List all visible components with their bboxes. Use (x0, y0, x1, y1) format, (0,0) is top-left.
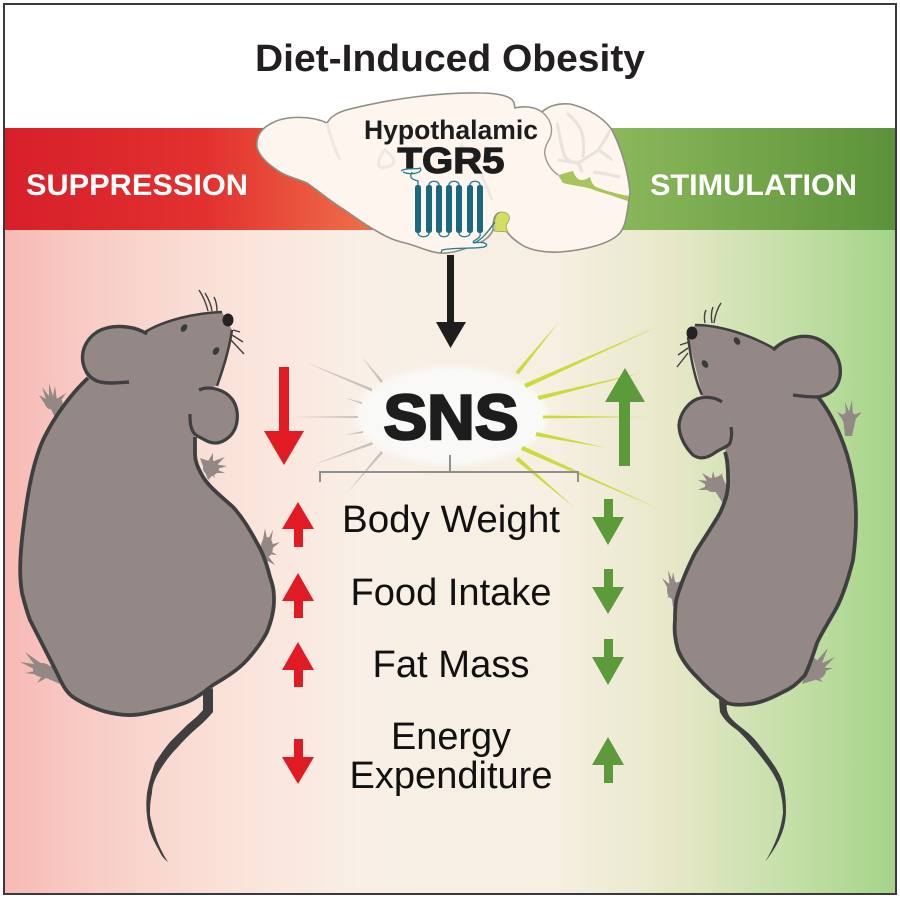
title: Diet-Induced Obesity (255, 38, 645, 80)
outcomes list (342, 499, 560, 797)
obese mouse head (145, 312, 232, 386)
lean mouse (662, 303, 862, 862)
arrow: receptor to SNS (436, 255, 466, 348)
obese mouse nose (222, 314, 234, 326)
energy: Energy (391, 716, 511, 758)
brain midline fold (327, 123, 492, 200)
TGR5 label: TGR5 (398, 140, 504, 181)
SNS label: SNS (384, 383, 518, 453)
fat mass: Fat Mass (372, 644, 530, 686)
obese mouse whiskers (199, 290, 244, 354)
yellow rays: stimulated SNS (516, 323, 657, 508)
yellow pituitary (494, 212, 509, 232)
lean mouse ear (773, 336, 840, 397)
TGR5 receptor (401, 168, 495, 253)
cerebellum outline (542, 112, 558, 175)
SNS glow ellipse (356, 367, 548, 465)
obese mouse body (20, 312, 274, 715)
lean mouse eyes (700, 336, 742, 369)
large red down arrow (264, 367, 304, 465)
cerebellum folds (557, 113, 620, 177)
lean mouse tail (719, 700, 786, 862)
food intake: Food Intake (350, 572, 552, 614)
green arrows column (592, 499, 624, 783)
stimulation label: STIMULATION (650, 169, 857, 202)
bracket (320, 455, 578, 482)
lean mouse body (675, 325, 856, 705)
suppression band (4, 128, 404, 230)
body weight: Body Weight (342, 499, 560, 541)
expenditure: Expenditure (350, 755, 552, 797)
lean mouse outline (675, 397, 856, 705)
transmembrane helices (415, 185, 483, 233)
gray rays: suppressed SNS (293, 357, 383, 493)
green brainstem region (558, 171, 629, 201)
obese mouse tail (146, 688, 213, 862)
red arrows column (282, 502, 314, 784)
receptor loops (401, 168, 495, 253)
obese mouse eyes (179, 323, 221, 356)
obese mouse forepaw (190, 388, 237, 443)
hypothalamic label: Hypothalamic (364, 115, 538, 145)
lean mouse nose (686, 326, 698, 340)
lean mouse forepaw (679, 397, 732, 458)
stimulation band (610, 128, 896, 230)
obese mouse outline (20, 378, 274, 715)
obese mouse (20, 290, 280, 862)
obese mouse ear (83, 326, 147, 383)
brain illustration (257, 93, 630, 253)
lean mouse head (688, 325, 773, 395)
lean mouse whiskers (677, 303, 721, 367)
suppression label: SUPPRESSION (26, 169, 248, 202)
lean mouse paws (662, 400, 862, 684)
large green up arrow (605, 368, 645, 466)
obese mouse paws (20, 383, 280, 684)
